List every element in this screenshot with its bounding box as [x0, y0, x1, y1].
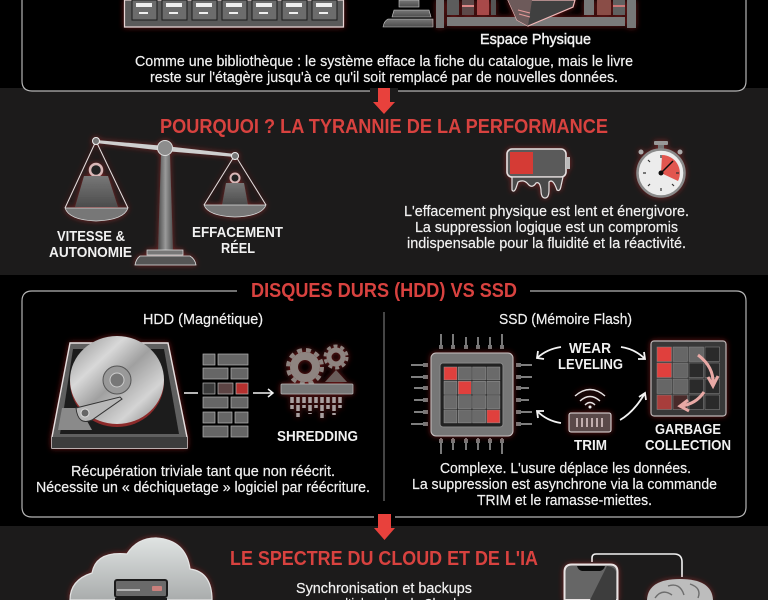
icon: catalogue card drawer: [124, 0, 344, 27]
label: garbage collection: COLLECTION: [645, 437, 731, 454]
label: shredding: SHREDDING: [277, 428, 358, 445]
arrow: HDD to shredding: [184, 389, 273, 397]
text: performance explanation: indispensable pour la fluidité et la réactivité.: [407, 235, 686, 252]
label: vitesse et autonomie: AUTONOMIE: [49, 244, 132, 261]
icon: brain: [647, 579, 713, 600]
label: TRIM: TRIM: [574, 437, 607, 454]
text: performance explanation: L'effacement physique est lent et énergivore.: [404, 203, 689, 220]
text: library analogy: reste sur l'étagère jusqu'à ce qu'il soit remplacé par de nouvelles données.: [150, 69, 618, 86]
icon: cloud with server: [70, 538, 212, 600]
heading: disks: DISQUES DURS (HDD) VS SSD: [251, 280, 517, 302]
text: cloud explanation: Synchronisation et backups: [296, 580, 472, 597]
heading: cloud and AI: LE SPECTRE DU CLOUD ET DE L'IA: [230, 548, 538, 570]
icon: smartphone: [564, 564, 618, 600]
text: SSD explanation: La suppression est asynchrone via la commande: [412, 476, 717, 493]
arrow: to cloud section: [374, 514, 395, 540]
icon: stopwatch: [638, 141, 684, 196]
text: performance explanation: La suppression logique est un compromis: [415, 219, 678, 236]
text: HDD explanation: Récupération triviale tant que non réécrit.: [71, 463, 335, 480]
icon: flash chip: [411, 334, 532, 454]
label: vitesse et autonomie: VITESSE &: [57, 228, 125, 245]
panel: logical vs physical space: [22, 0, 746, 91]
label: espace physique: Espace Physique: [480, 31, 591, 48]
icon: connector phone to brain: [592, 554, 682, 577]
arrows: data flow: [537, 347, 646, 423]
text: HDD explanation: Nécessite un « déchiquetage » logiciel par réécriture.: [36, 479, 370, 496]
icon: shredder gears: [281, 346, 353, 418]
text: library analogy: Comme une bibliothèque : le système efface la fiche du catalogue, mais le livre: [135, 53, 633, 70]
text: SSD explanation: Complexe. L'usure déplace les données.: [440, 460, 691, 477]
arrow: to performance section: [373, 88, 395, 114]
right pan and weight: [204, 155, 266, 217]
label: garbage collection: GARBAGE: [655, 421, 721, 438]
label: effacement reel: EFFACEMENT: [192, 224, 283, 241]
left pan and weight: [65, 141, 128, 221]
icon: sector grid: [203, 354, 248, 437]
label: effacement reel: RÉEL: [221, 240, 255, 257]
icon: balance scale: [65, 138, 266, 265]
icon: TRIM controller: [569, 390, 611, 432]
label: wear leveling: LEVELING: [558, 356, 623, 373]
icon: melting battery: [507, 149, 570, 198]
text: SSD explanation: TRIM et le ramasse-miettes.: [477, 492, 652, 509]
heading: performance: POURQUOI ? LA TYRANNIE DE LA PERFORMANCE: [160, 116, 608, 138]
icon: lamp pedestal: [383, 0, 433, 27]
icon: garbage collection grid: [651, 341, 726, 416]
subheading: HDD: HDD (Magnétique): [143, 311, 263, 328]
label: wear leveling: WEAR: [569, 340, 611, 357]
icon: bookshelf with book: [436, 0, 636, 28]
icon: hard disk drive: [52, 336, 187, 448]
subheading: SSD: SSD (Mémoire Flash): [499, 311, 632, 328]
panel: HDD vs SSD: [22, 280, 746, 517]
